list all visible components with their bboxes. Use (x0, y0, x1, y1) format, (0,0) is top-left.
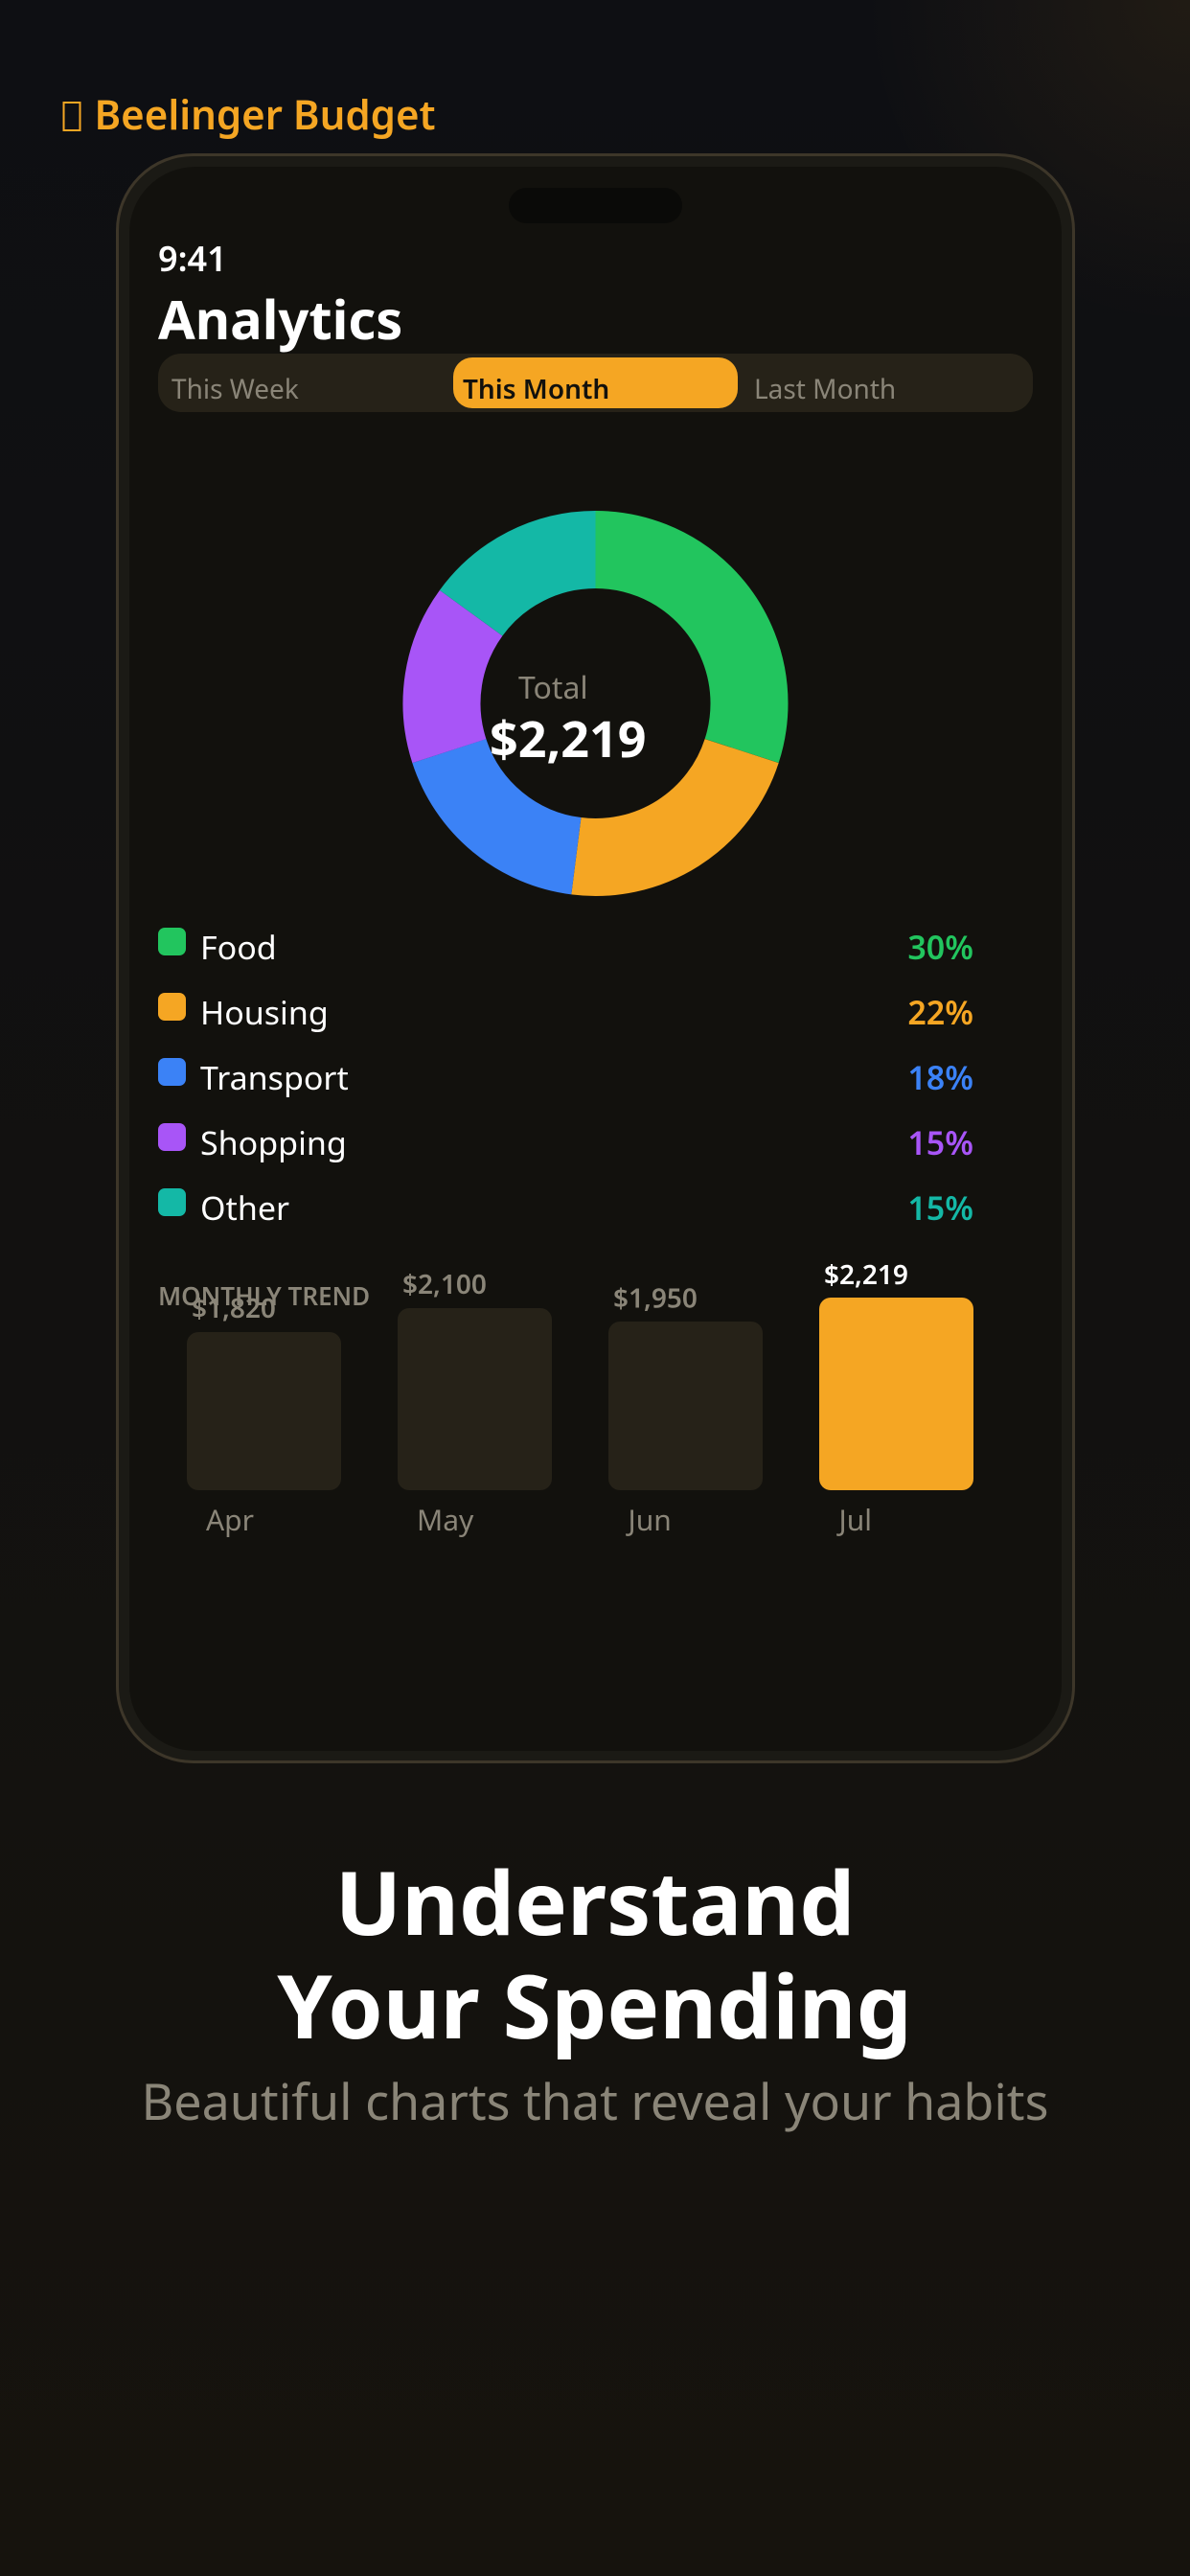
legend: transport: Transport (200, 1055, 349, 1099)
bar: May (398, 1266, 552, 1539)
legend: housing: Housing (200, 990, 329, 1034)
legend: food (158, 925, 973, 969)
period tabs: This Month (463, 371, 609, 407)
headline (277, 1841, 912, 2064)
donut center total: Total (518, 667, 588, 708)
headline: Your Spending (277, 1944, 912, 2064)
legend: transport: 18% (907, 1055, 973, 1099)
legend: other (158, 1185, 973, 1230)
headline: Understand (335, 1841, 855, 1961)
subtitle: Beautiful charts that reveal your habits (142, 2067, 1048, 2135)
period tabs: Last Month (754, 371, 896, 407)
donut center total (490, 667, 647, 772)
dynamic island (509, 188, 682, 223)
bar: April: $1,820 (192, 1290, 276, 1326)
bar: June: Jun (625, 1500, 672, 1539)
bar: July: Jul (835, 1500, 872, 1539)
legend: food: 30% (907, 925, 973, 969)
legend: shopping: 15% (907, 1120, 973, 1164)
phone mockup (117, 155, 1073, 1761)
legend: other: Other (200, 1185, 289, 1230)
active tab (453, 357, 738, 408)
screen title: Analytics (158, 283, 402, 356)
donut chart (380, 489, 811, 918)
monthly trend heading: MONTHLY TREND (158, 1278, 370, 1313)
bar: June: $1,950 (613, 1280, 698, 1317)
legend: housing (158, 990, 973, 1034)
bar: April (187, 1290, 341, 1539)
legend: transport (158, 1055, 973, 1099)
bar: June (608, 1280, 763, 1539)
bar: May: $2,100 (402, 1266, 487, 1302)
status time: 9:41 (158, 235, 227, 282)
bar chart (187, 1256, 973, 1539)
bar: April: Apr (206, 1500, 254, 1539)
legend: housing: 22% (907, 990, 973, 1034)
legend: shopping: Shopping (200, 1120, 347, 1164)
period tabs (158, 354, 1033, 412)
legend (158, 925, 973, 1230)
donut center total: $2,219 (490, 704, 647, 772)
bar: July: $2,219 (824, 1256, 908, 1293)
phone frame (117, 155, 1073, 1761)
period tabs: This Week (172, 371, 299, 407)
legend: food: Food (200, 925, 277, 969)
legend: other: 15% (907, 1185, 973, 1230)
phone screen (129, 167, 1062, 1751)
legend: shopping (158, 1120, 973, 1164)
bar: May: May (417, 1500, 474, 1539)
icon: missing-glyph box (63, 103, 80, 130)
brand label: Beelinger Budget (94, 87, 436, 142)
bar: July (819, 1256, 973, 1539)
